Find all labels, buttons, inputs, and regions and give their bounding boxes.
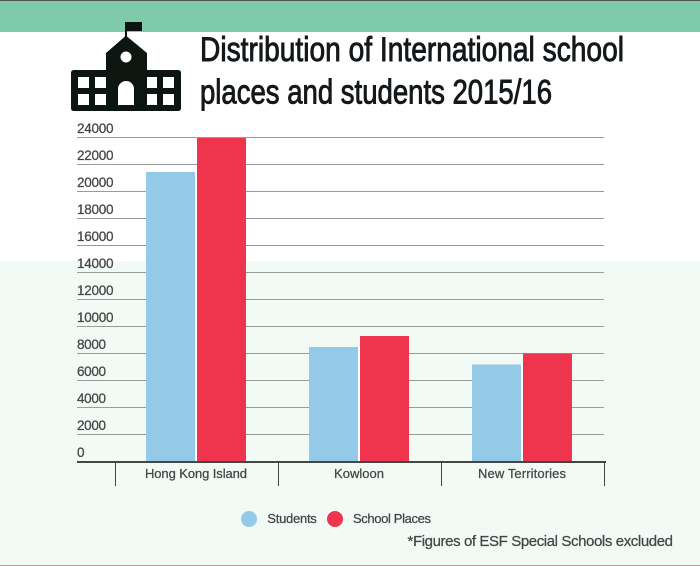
category labels <box>145 466 566 481</box>
y-axis labels: 12000 <box>77 283 114 298</box>
title <box>200 31 624 112</box>
y-axis labels <box>77 121 114 460</box>
category labels: Kowloon <box>334 466 384 481</box>
top banner <box>0 0 700 32</box>
legend: Students <box>267 511 317 526</box>
y-axis labels: 18000 <box>77 202 114 217</box>
footnote: *Figures of ESF Special Schools excluded <box>408 533 673 550</box>
y-axis labels: 24000 <box>77 121 114 136</box>
y-axis labels: 22000 <box>77 148 114 163</box>
y-axis labels: 8000 <box>77 337 106 352</box>
y-axis labels: 2000 <box>77 418 106 433</box>
y-axis labels: 16000 <box>77 229 114 244</box>
category labels: New Territories <box>478 466 566 481</box>
legend: School Places <box>353 511 432 526</box>
bar chart <box>77 121 606 486</box>
category labels: Hong Kong Island <box>145 466 247 481</box>
title: Distribution of International school <box>200 31 624 69</box>
y-axis labels: 0 <box>77 445 85 460</box>
x axis <box>77 461 606 486</box>
bars: Kowloon <box>309 336 409 461</box>
y-axis labels: 4000 <box>77 391 106 406</box>
y-axis labels: 6000 <box>77 364 106 379</box>
y-axis labels: 20000 <box>77 175 114 190</box>
icon: school building <box>71 22 181 111</box>
y-axis labels: 10000 <box>77 310 114 325</box>
y-axis labels: 14000 <box>77 256 114 271</box>
bars: Hong Kong Island <box>146 138 246 461</box>
bars: New Territories <box>472 354 572 461</box>
legend <box>241 511 432 527</box>
title: places and students 2015/16 <box>200 74 552 112</box>
